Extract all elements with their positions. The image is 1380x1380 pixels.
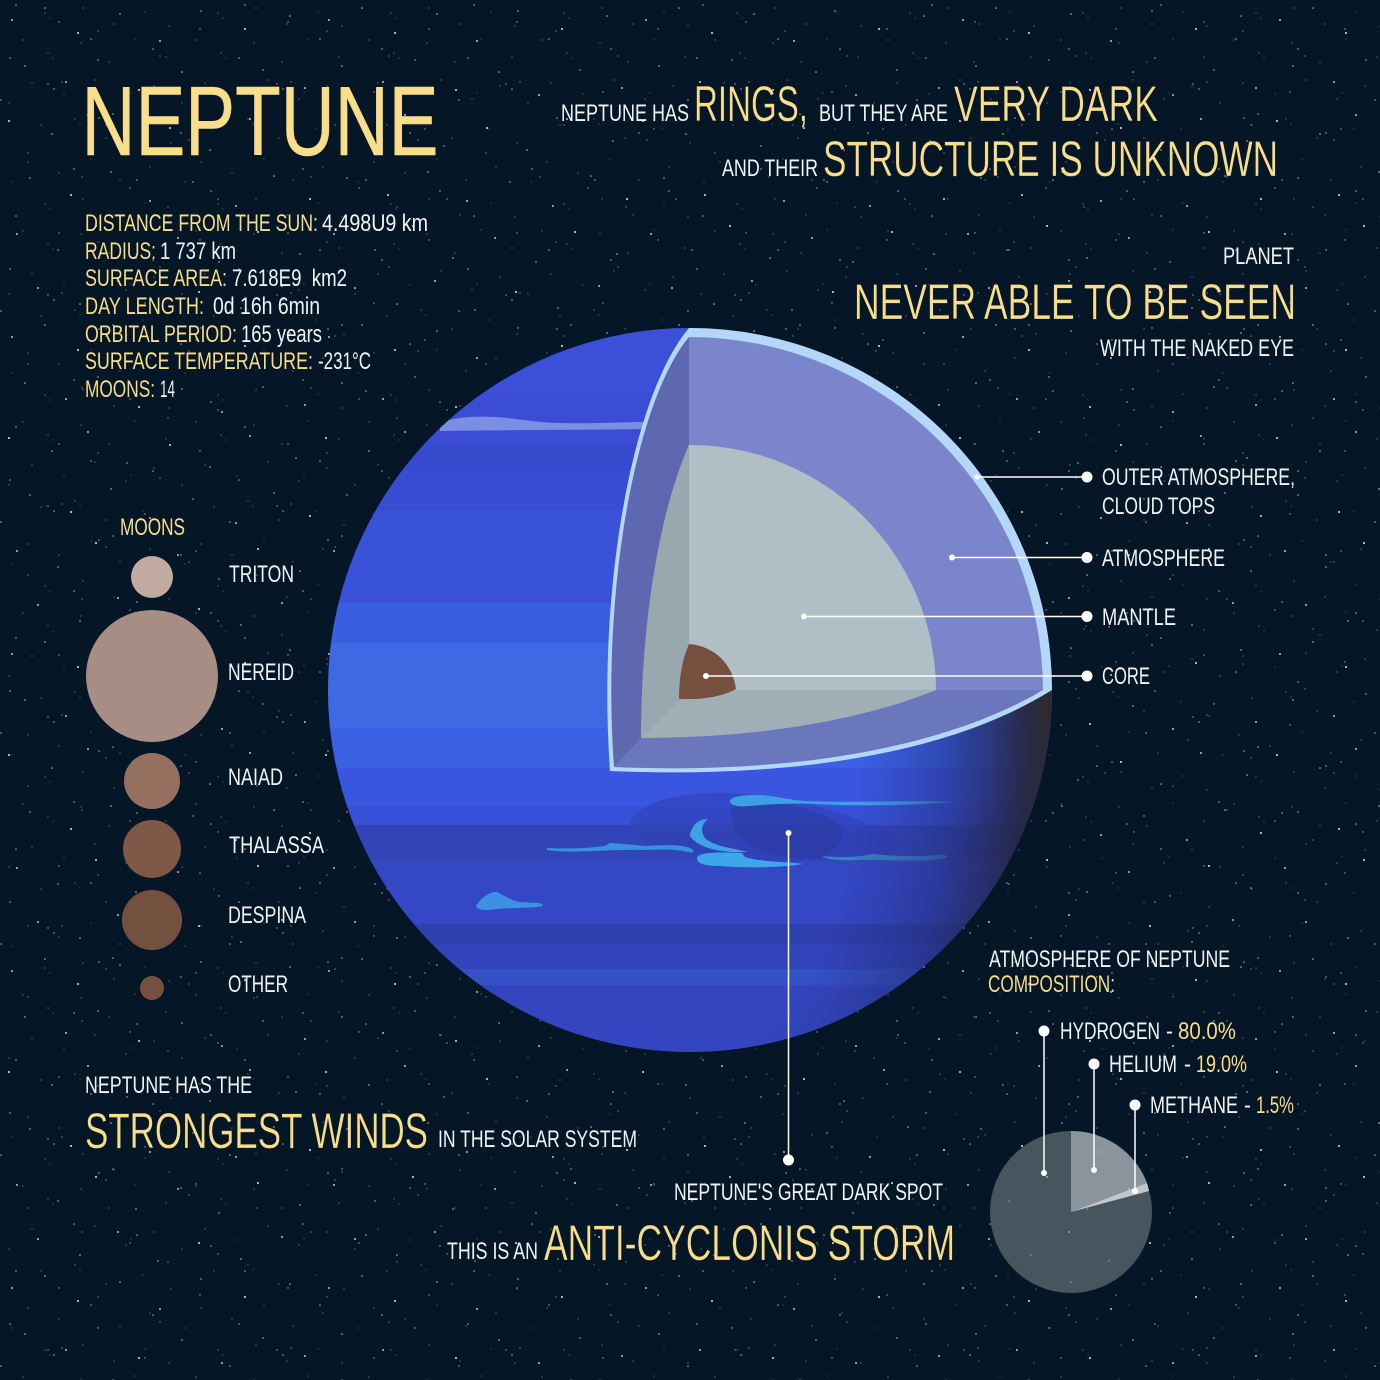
heading: rings statement: [561, 76, 1278, 187]
callout: great dark spot: [447, 830, 955, 1271]
core: [679, 644, 736, 699]
heading: never able to be seen: WITH THE NAKED EYE: [1100, 335, 1294, 362]
heading: rings statement: RINGS,: [694, 76, 808, 132]
pie slice: methane: [1071, 1183, 1149, 1212]
atmosphere floor: [614, 690, 1043, 768]
pie slice: helium: [1071, 1131, 1147, 1212]
callout: outer atmosphere: [974, 464, 1295, 520]
text block: planet statistics: 14: [160, 376, 175, 403]
moon: Naiad: [124, 753, 283, 809]
planet: Neptune globe: [320, 320, 1060, 1060]
legend: helium: 19.0%: [1196, 1051, 1247, 1078]
callout: core: CORE: [1102, 663, 1150, 690]
moon: Despina: [122, 890, 306, 950]
moon: Other: [140, 971, 288, 1000]
moon: Thalassa: THALASSA: [229, 832, 324, 859]
text block: planet statistics: DISTANCE FROM THE SUN:: [85, 210, 318, 237]
heading: rings statement: NEPTUNE HAS: [561, 100, 689, 127]
text block: planet statistics: 7.618E9 km2: [232, 265, 347, 292]
moon: Naiad: NAIAD: [228, 764, 283, 791]
heading: never able to be seen: PLANET: [1223, 243, 1294, 270]
moon: Despina: DESPINA: [228, 902, 306, 929]
atmosphere back face: [689, 337, 1043, 690]
great dark spot: [630, 792, 870, 862]
atmosphere left wall: [611, 337, 689, 767]
cloud streaks: [440, 417, 953, 910]
callout: core: [703, 663, 1150, 690]
heading: atmosphere composition: [988, 946, 1230, 998]
legend: methane: METHANE: [1150, 1092, 1238, 1119]
callout: atmosphere: [949, 545, 1225, 572]
title: NEPTUNE: [82, 66, 438, 176]
callout: mantle: MANTLE: [1102, 604, 1176, 631]
callout: mantle: [801, 604, 1176, 631]
legend: methane: 1.5%: [1256, 1092, 1294, 1119]
legend: hydrogen: HYDROGEN: [1060, 1018, 1160, 1045]
legend: helium: [1088, 1051, 1247, 1173]
legend: hydrogen: -: [1166, 1018, 1173, 1045]
text block: planet statistics: -231°C: [318, 348, 371, 375]
text block: planet statistics: 1 737 km: [160, 238, 236, 265]
text block: planet statistics: SURFACE AREA:: [85, 265, 227, 292]
planet cutaway: interior layers: [607, 328, 1052, 772]
moon: Thalassa: [123, 820, 324, 878]
text block: planet statistics: DAY LENGTH:: [85, 293, 204, 320]
text block: strongest winds: STRONGEST WINDS: [85, 1103, 428, 1159]
callout: great dark spot: THIS IS AN: [447, 1238, 538, 1265]
text block: strongest winds: [85, 1072, 637, 1159]
moon: Triton: TRITON: [229, 561, 294, 588]
text block: planet statistics: 165 years: [241, 321, 322, 348]
heading: rings statement: VERY DARK: [954, 76, 1158, 132]
mantle back face: [689, 445, 936, 690]
text block: planet statistics: SURFACE TEMPERATURE:: [85, 348, 313, 375]
heading: atmosphere composition: COMPOSITION:: [988, 971, 1115, 998]
text block: planet statistics: RADIUS:: [85, 238, 156, 265]
pie chart: atmosphere composition: [990, 1131, 1152, 1293]
legend: helium: -: [1184, 1051, 1191, 1078]
heading: never able to be seen: [854, 243, 1296, 362]
text block: planet statistics: ORBITAL PERIOD:: [85, 321, 237, 348]
callout: outer atmosphere: CLOUD TOPS: [1102, 493, 1215, 520]
legend: hydrogen: 80.0%: [1178, 1018, 1236, 1045]
text block: planet statistics: [85, 210, 428, 403]
moon: Other: OTHER: [228, 971, 288, 998]
moon: Nereid: [86, 610, 294, 742]
callout: atmosphere: ATMOSPHERE: [1102, 545, 1225, 572]
legend: hydrogen: [1038, 1018, 1236, 1176]
mantle left wall: [641, 445, 689, 738]
legend: helium: HELIUM: [1109, 1051, 1177, 1078]
legend: methane: [1130, 1092, 1294, 1194]
callout: great dark spot: ANTI-CYCLONIS STORM: [544, 1215, 955, 1271]
heading: atmosphere composition: ATMOSPHERE OF NEPTUNE: [989, 946, 1230, 973]
moon: Triton: [131, 556, 294, 598]
heading: rings statement: AND THEIR: [722, 155, 818, 182]
callout: great dark spot: NEPTUNE'S GREAT DARK SPOT: [674, 1179, 943, 1206]
legend: methane: -: [1244, 1092, 1251, 1119]
callout: outer atmosphere: OUTER ATMOSPHERE,: [1102, 464, 1295, 491]
text block: planet statistics: 4.498U9 km: [322, 210, 428, 237]
outer atmosphere rim: [607, 328, 1052, 772]
mantle floor: [641, 690, 936, 738]
panel: moons: [86, 514, 324, 1000]
text block: strongest winds: IN THE SOLAR SYSTEM: [438, 1126, 637, 1153]
planet surface bands: [320, 320, 1060, 1060]
text block: planet statistics: MOONS:: [85, 376, 155, 403]
moon: Nereid: NEREID: [228, 659, 294, 686]
text block: strongest winds: NEPTUNE HAS THE: [85, 1072, 252, 1099]
heading: rings statement: BUT THEY ARE: [819, 100, 948, 127]
panel: moons: MOONS: [120, 514, 185, 541]
pie slice: hydrogen: [990, 1131, 1152, 1293]
text block: planet statistics: 0d 16h 6min: [213, 293, 320, 320]
